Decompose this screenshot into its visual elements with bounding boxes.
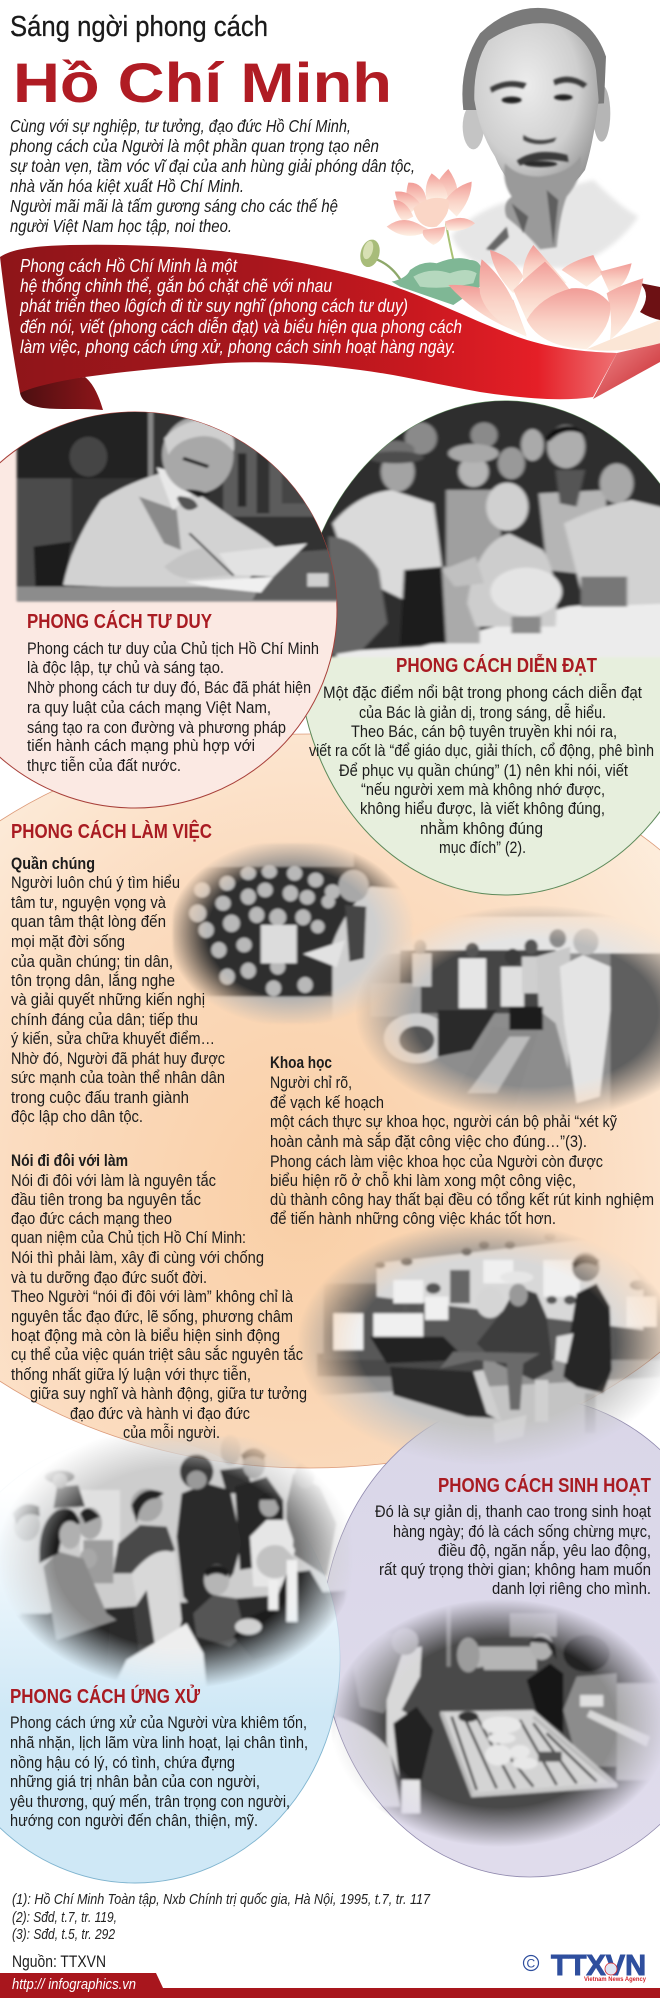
footnotes <box>12 1891 431 1943</box>
text: quần chúng <box>11 854 225 1126</box>
ribbon text: phát triển theo lôgích đi từ suy nghĩ (phong cách tư duy) <box>19 296 408 316</box>
text: quần chúng: tâm tư, nguyện vọng và <box>11 893 166 912</box>
photo: Bác Hồ visiting a factory <box>354 903 660 1130</box>
source: Nguồn: TTXVN <box>12 1952 106 1971</box>
text: phong cách tư duy: sáng tạo ra con đường và phương pháp <box>27 718 286 737</box>
text: quần chúng: trong cuộc đấu tranh giành <box>11 1088 189 1107</box>
ribbon text: Phong cách Hồ Chí Minh là một <box>20 256 238 276</box>
text: nói đi đôi với làm: Theo Người “nói đi đôi với làm” không chỉ là <box>11 1287 293 1306</box>
ribbon text: đến nói, viết (phong cách diễn đạt) và biểu hiện qua phong cách <box>20 317 462 337</box>
text: phong cách tư duy <box>27 639 319 775</box>
intro text: Cùng với sự nghiệp, tư tưởng, đạo đức Hồ Chí Minh, <box>10 116 351 136</box>
text: khoa học: Người chỉ rõ, <box>270 1073 352 1092</box>
text: nói đi đôi với làm: thống nhất giữa lý luận với thực tiễn, <box>11 1365 251 1384</box>
title: Hồ Chí Minh: Hồ Chí Minh <box>13 51 392 114</box>
text: nói đi đôi với làm: giữa suy nghĩ và hành động, giữa tư tưởng <box>30 1384 307 1403</box>
icon: lotus bud and leaves <box>357 223 482 305</box>
text: khoa học <box>270 1053 654 1228</box>
text: phong cách tư duy: ra quy luật của cách mạng Việt Nam, <box>27 698 271 717</box>
text: phong cách tư duy: Phong cách tư duy của Chủ tịch Hồ Chí Minh <box>27 639 319 658</box>
text: phong cách ứng xử: Phong cách ứng xử của Người vừa khiêm tốn, <box>10 1713 307 1732</box>
text: phong cách diễn đạt: của Bác là giản dị, trong sáng, dễ hiểu. <box>359 703 606 722</box>
text: phong cách ứng xử: hướng con người đến chân, thiện, mỹ. <box>10 1811 258 1830</box>
photo: Bác Hồ at a bamboo dining table <box>332 1601 660 1846</box>
text: khoa học: hoàn cảnh mà sắp đặt công việc cho đúng…”(3). <box>270 1132 587 1151</box>
text: phong cách diễn đạt: không hiểu được, là viết không đúng, <box>360 799 605 818</box>
text: khoa học: Phong cách làm việc khoa học của Người còn được <box>270 1152 603 1171</box>
text: quần chúng: chính đáng của dân; tiếp thu <box>11 1010 198 1029</box>
text: nói đi đôi với làm: hoạt động mà còn là biểu hiện sinh động <box>11 1326 280 1345</box>
text: nói đi đôi với làm: Nói đi đôi với làm là nguyên tắc <box>11 1171 216 1190</box>
text: quần chúng: ý kiến, sửa chữa khuyết điểm… <box>11 1029 215 1048</box>
panel: phong cách diễn đạt background <box>298 401 660 895</box>
text: phong cách ứng xử: nồng hậu có lý, có tình, chứa đựng <box>10 1753 235 1772</box>
text: phong cách sinh hoạt <box>375 1502 651 1598</box>
text: nói đi đôi với làm: của mỗi người. <box>123 1423 220 1442</box>
photo: crowd greeting Bác Hồ <box>173 843 412 1023</box>
intro text: sự toàn vẹn, tầm vóc vĩ đại của anh hùng giải phóng dân tộc, <box>10 156 415 176</box>
text: khoa học: để vạch kế hoạch <box>270 1093 384 1112</box>
text: quần chúng: Nhờ đó, Người đã phát huy được <box>11 1049 225 1068</box>
heading: phong cách tư duy: PHONG CÁCH TƯ DUY <box>27 610 213 633</box>
panel: phong cách làm việc background <box>0 734 660 1468</box>
heading: phong cách làm việc: PHONG CÁCH LÀM VIỆC <box>11 819 212 843</box>
text: nói đi đôi với làm: đạo đức cách mạng theo <box>11 1209 172 1228</box>
text: nói đi đôi với làm: và tu dưỡng đạo đức suốt đời. <box>11 1268 207 1287</box>
photo: Bác Hồ with villagers and rice <box>0 1435 350 1697</box>
intro text: nhà văn hóa kiệt xuất Hồ Chí Minh. <box>10 176 244 196</box>
ribbon text: làm việc, phong cách ứng xử, phong cách sinh hoạt hàng ngày. <box>20 337 456 357</box>
footnotes: (2): Sđd, t.7, tr. 119, <box>12 1909 117 1926</box>
ribbon fold: right dark end <box>640 283 660 320</box>
logo: TTXVN: Vietnam News Agency <box>584 1976 646 1983</box>
text: phong cách diễn đạt <box>309 683 654 857</box>
title: Sáng ngời phong cách: Sáng ngời phong cách <box>10 11 268 43</box>
text: quần chúng: sức mạnh của toàn thể nhân dân <box>11 1068 225 1087</box>
text: phong cách diễn đạt: mục đích” (2). <box>439 838 526 857</box>
text: quần chúng: Người luôn chú ý tìm hiểu <box>11 873 180 892</box>
panel: phong cách tư duy background <box>0 412 337 808</box>
photo: Bác Hồ with young people <box>316 397 660 657</box>
ribbon text <box>19 256 462 357</box>
text: quần chúng: tôn trọng dân, lắng nghe <box>11 971 175 990</box>
text: quần chúng: và giải quyết những kiến nghị <box>11 990 205 1009</box>
text: khoa học: Khoa học <box>270 1053 332 1072</box>
text: phong cách ứng xử: yêu thương, quý mến, trân trọng con người, <box>10 1792 290 1811</box>
icon: large lotus flower <box>448 245 660 351</box>
text: nói đi đôi với làm <box>11 1151 307 1442</box>
footnotes: (3): Sđd, t.5, tr. 292 <box>12 1926 116 1943</box>
text: nói đi đôi với làm: đạo đức và hành vi đạo đức <box>70 1404 250 1423</box>
icon: small lotus flower <box>387 169 475 245</box>
text: quần chúng: mọi mặt đời sống <box>11 932 125 951</box>
ribbon text: hệ thống chỉnh thể, gắn bó chặt chẽ với nhau <box>20 276 332 296</box>
text: phong cách ứng xử: nhã nhặn, lịch lãm vừa linh hoạt, lại chân tình, <box>10 1733 308 1752</box>
panel: phong cách ứng xử background <box>0 1437 340 1883</box>
logo: TTXVN: C <box>526 1956 536 1970</box>
text: nói đi đôi với làm: quan niệm của Chủ tịch Hồ Chí Minh: <box>11 1228 246 1247</box>
photo: Bác Hồ writing at desk <box>14 412 337 603</box>
footer bar with url tab <box>0 1973 660 1998</box>
intro text: người Việt Nam học tập, noi theo. <box>10 216 232 236</box>
intro text <box>9 116 415 236</box>
logo: TTXVN: TTXVN <box>551 1950 646 1982</box>
photo: Bác Hồ ploughing with a crowd watching <box>297 1227 660 1470</box>
text: nói đi đôi với làm: đầu tiên trong ba nguyên tắc <box>11 1190 201 1209</box>
text: phong cách tư duy: thực tiễn của đất nước. <box>27 756 181 775</box>
panel: phong cách sinh hoạt background <box>322 1397 660 1877</box>
text: phong cách diễn đạt: Theo Bác, cán bộ tuyên truyền khi nói ra, <box>351 722 617 741</box>
text: phong cách ứng xử <box>10 1713 308 1830</box>
text: nói đi đôi với làm: Nói đi đôi với làm <box>11 1151 128 1170</box>
text: phong cách tư duy: Nhờ phong cách tư duy đó, Bác đã phát hiện <box>27 678 311 697</box>
text: phong cách ứng xử: những giá trị nhân bản của con người, <box>10 1772 260 1791</box>
text: khoa học: biểu hiện rõ ở chỗ khi làm xong một công việc, <box>270 1171 576 1190</box>
text: nói đi đôi với làm: cụ thể của việc quán triệt sâu sắc nguyên tắc <box>11 1345 303 1364</box>
footnotes: (1): Hồ Chí Minh Toàn tập, Nxb Chính trị quốc gia, Hà Nội, 1995, t.7, tr. 117 <box>12 1891 431 1908</box>
text: quần chúng: quan tâm thật lòng đến <box>11 912 166 931</box>
text: nói đi đôi với làm: Nói thì phải làm, xây đi cùng với chống <box>11 1248 264 1267</box>
ribbon banner <box>0 245 617 399</box>
intro text: Người mãi mãi là tấm gương sáng cho các thế hệ <box>10 196 338 216</box>
text: phong cách tư duy: tiến hành cách mạng phù hợp với <box>27 736 255 755</box>
footer bar with url tab: http:// infographics.vn <box>12 1976 136 1993</box>
text: phong cách diễn đạt: nhằm không đúng <box>420 819 543 838</box>
text: quần chúng: của quần chúng; tin dân, <box>11 952 173 971</box>
photo: portrait of Hồ Chí Minh <box>452 8 638 268</box>
text: phong cách tư duy: là độc lập, tự chủ và sáng tạo. <box>27 658 224 677</box>
text: khoa học: để tiến hành những công việc khác tốt hơn. <box>270 1209 556 1228</box>
heading: phong cách diễn đạt: PHONG CÁCH DIỄN ĐẠT <box>396 654 597 677</box>
ribbon fold: left tail <box>20 377 103 410</box>
text: phong cách diễn đạt: “nếu người xem mà không nhớ được, <box>361 780 605 799</box>
text: quần chúng: độc lập cho dân tộc. <box>11 1107 143 1126</box>
text: nói đi đôi với làm: nguyên tắc đạo đức, lẽ sống, phương châm <box>11 1307 293 1326</box>
intro text: phong cách của Người là một phần quan trọng tạo nên <box>9 136 379 156</box>
text: quần chúng: Quần chúng <box>11 854 95 873</box>
ribbon fold: right pink band <box>593 343 660 399</box>
heading: phong cách ứng xử: PHONG CÁCH ỨNG XỬ <box>10 1684 200 1708</box>
